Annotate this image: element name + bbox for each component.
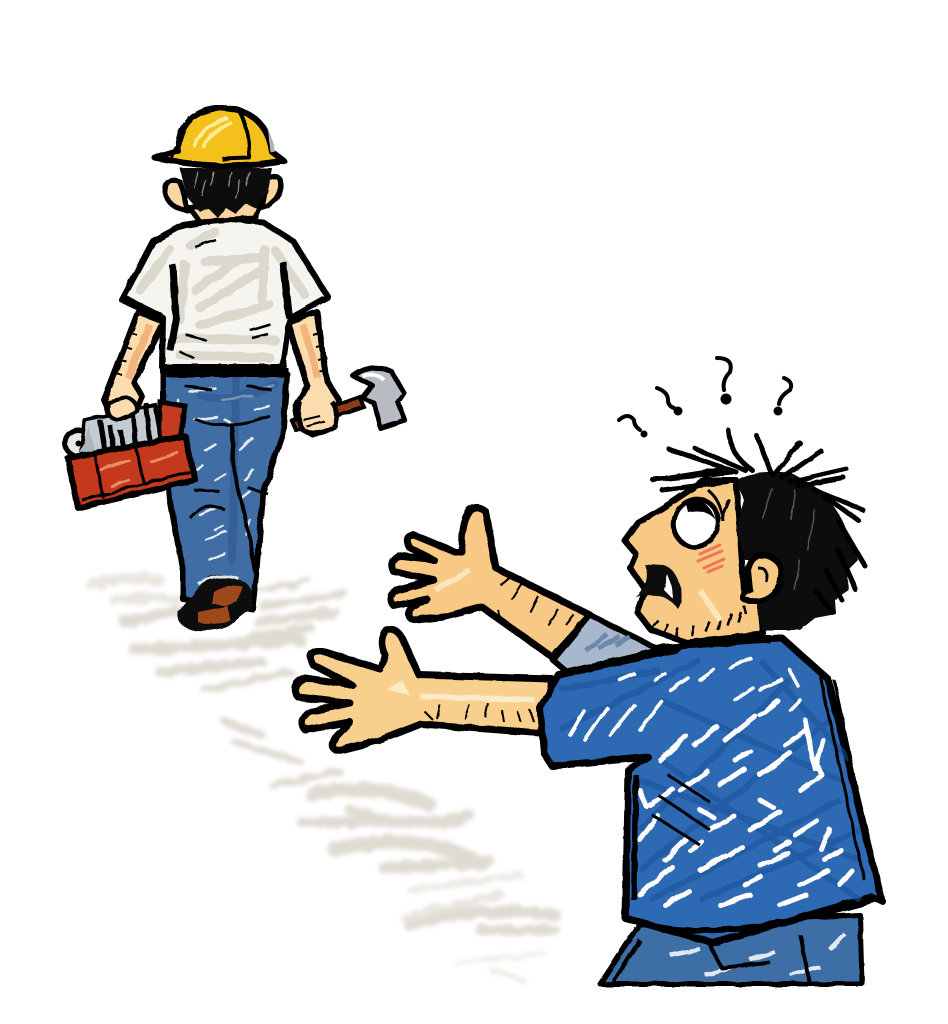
worker: boot: [178, 574, 253, 631]
man: ear: [742, 555, 782, 601]
man: back sleeve: [553, 615, 660, 672]
worker walking away: [65, 108, 405, 631]
man: front arm and hand: [295, 629, 552, 750]
question mark 4: [774, 378, 791, 416]
worker: hammer: [292, 368, 405, 433]
question marks above head: [619, 358, 791, 438]
worker: head with ears and hair: [165, 168, 281, 222]
illustration: worker walking away from a confused man: [62, 105, 886, 988]
worker: arms: [104, 312, 339, 434]
man: wide eye: [667, 490, 730, 553]
worker: yellow hard hat: [155, 108, 284, 166]
question mark 2: [657, 388, 682, 416]
man: back arm and hand: [390, 507, 590, 657]
ground shadow trail: [92, 578, 555, 982]
worker: red toolbox: [65, 398, 195, 508]
worker: jeans: [160, 370, 288, 609]
confused man reaching out: [295, 358, 882, 984]
worker: t-shirt: [122, 219, 328, 367]
man: blue t-shirt: [540, 638, 882, 943]
man: spiky black hair: [653, 430, 865, 630]
question mark 3: [717, 358, 732, 404]
man: red blush: [698, 545, 724, 572]
question mark 1: [619, 416, 648, 438]
man: open mouth: [636, 564, 682, 609]
man: jeans: [600, 915, 862, 984]
man: face: [625, 480, 763, 642]
